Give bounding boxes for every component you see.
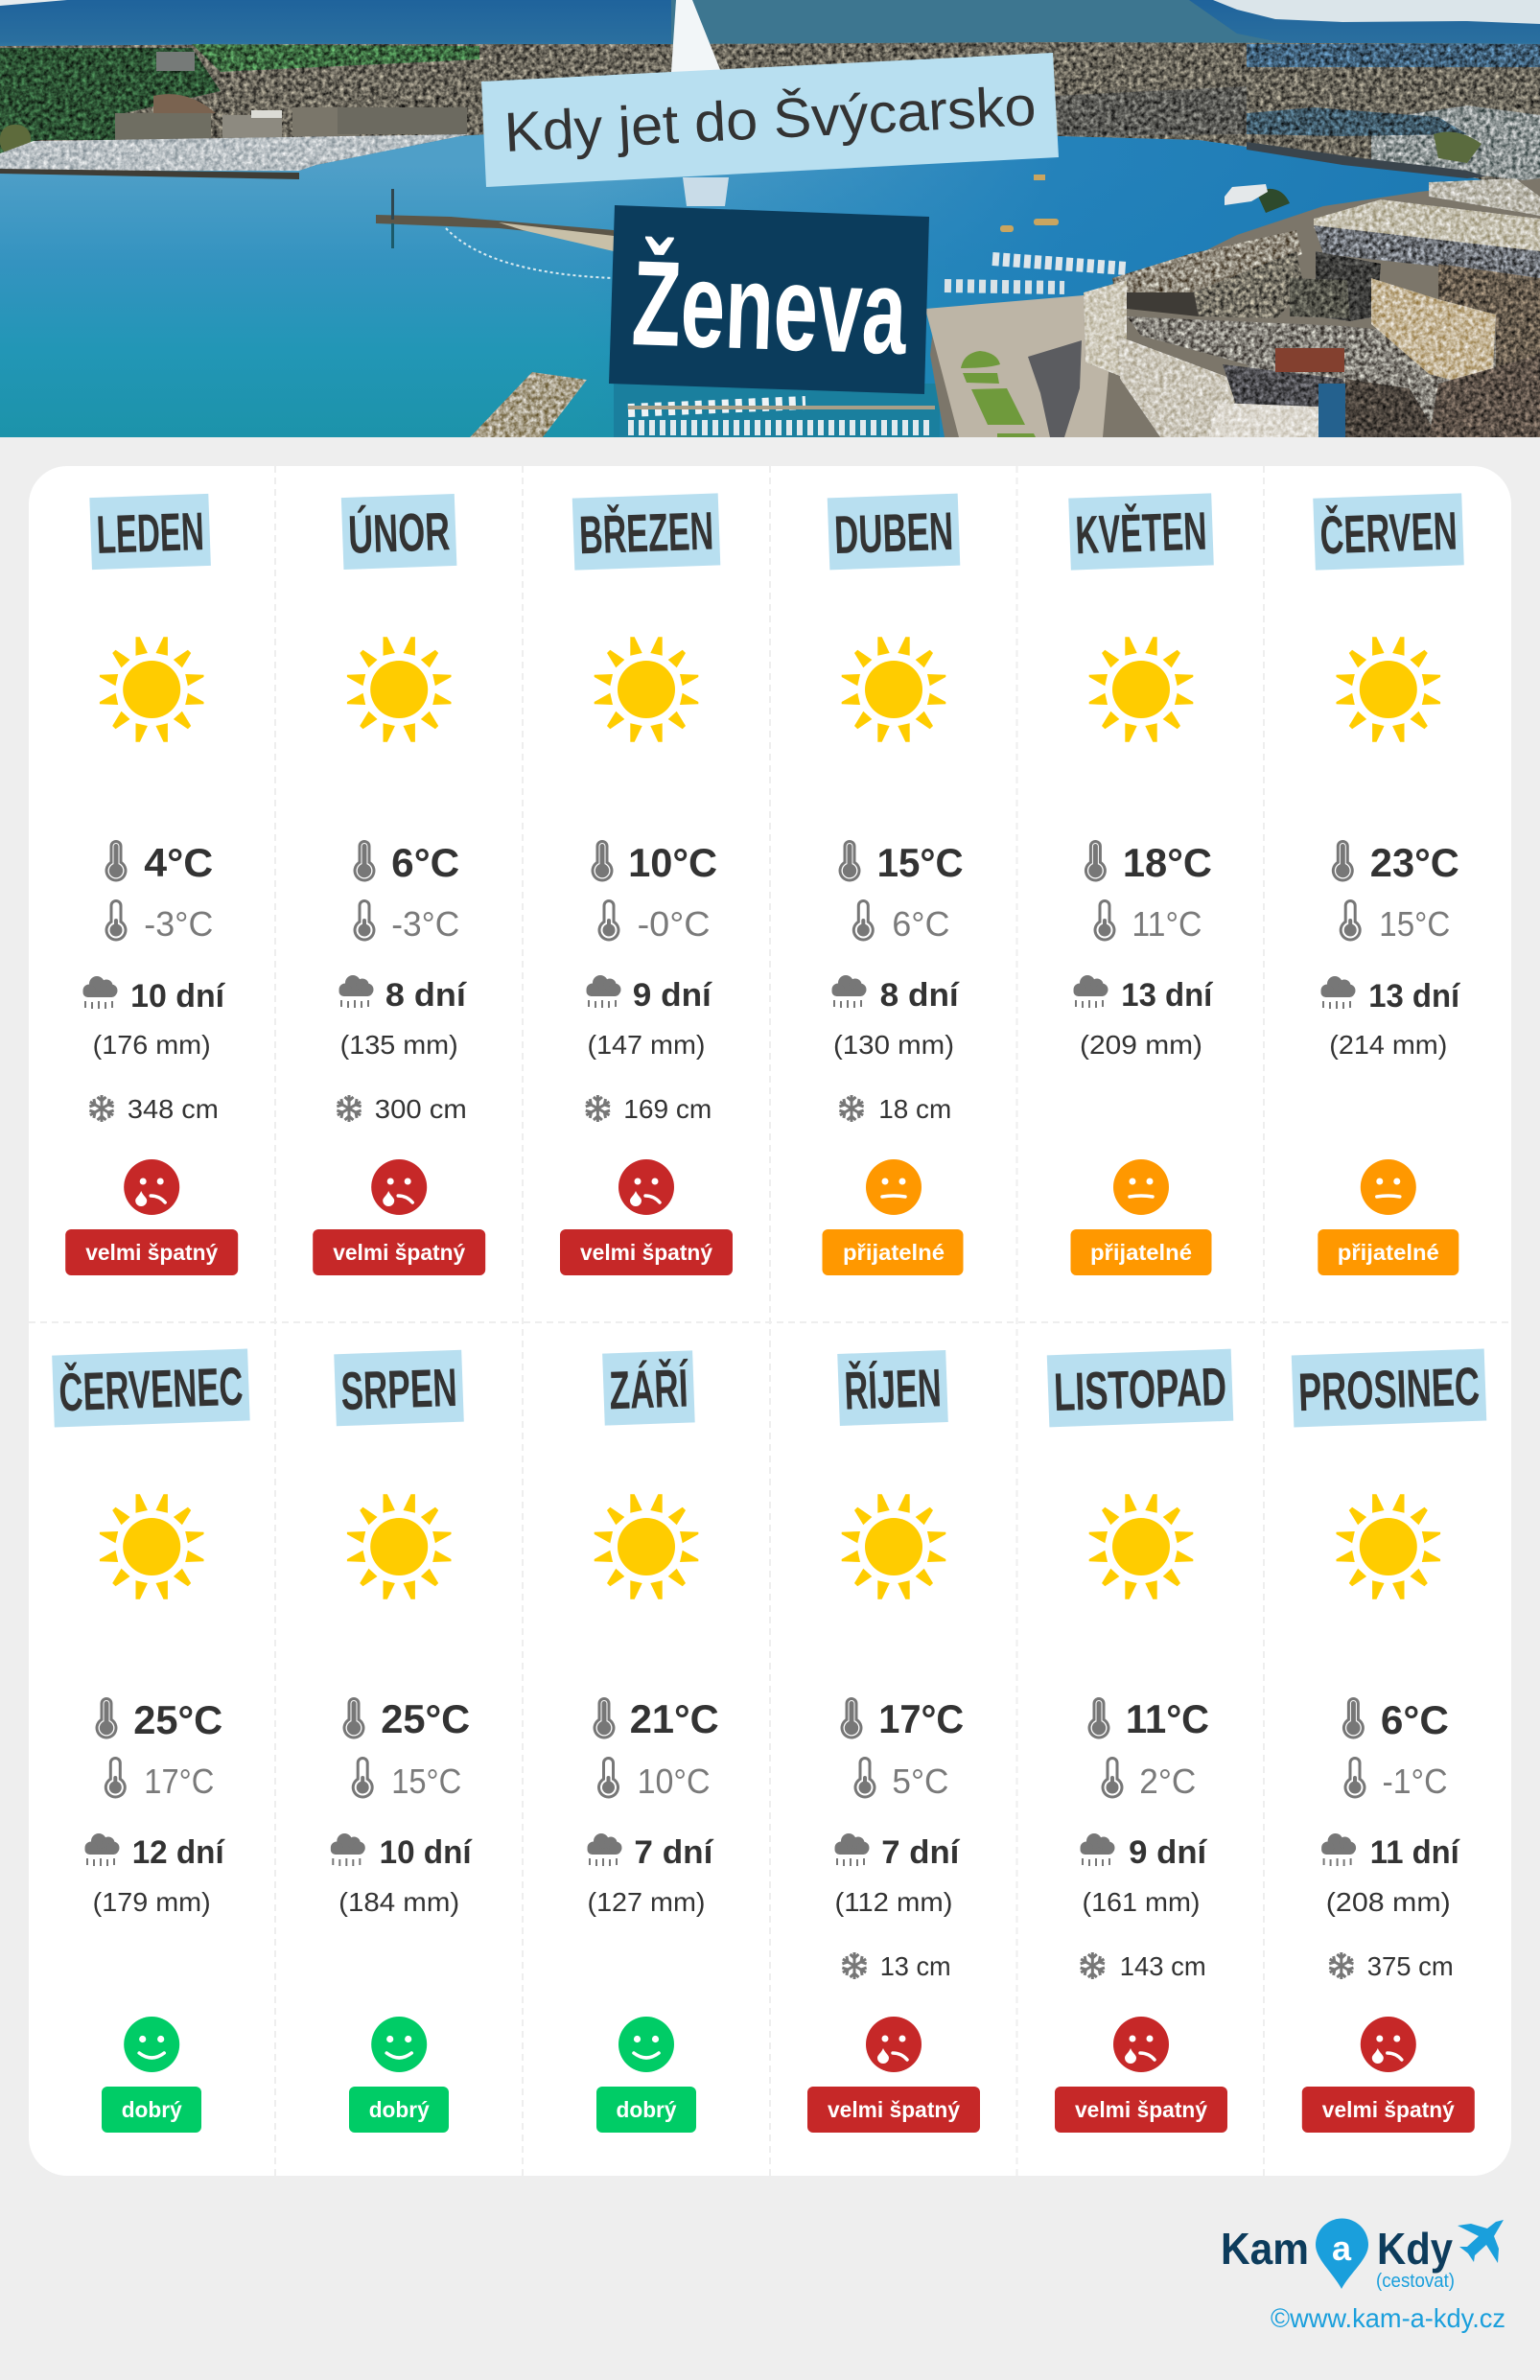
icon: thermometer high <box>105 840 127 882</box>
icon: sun <box>1089 637 1193 742</box>
icon: rain cloud <box>834 1833 869 1866</box>
icon: thermometer high <box>1085 840 1107 882</box>
icon: thermometer high <box>593 1697 616 1739</box>
icon: sun <box>842 637 945 742</box>
icon: rain cloud <box>1321 976 1356 1009</box>
high temperature: 4°C <box>144 840 213 885</box>
icon: thermometer high <box>591 840 614 882</box>
rating badge: dobrý <box>369 2097 430 2122</box>
title banner: Ženeva <box>609 205 929 394</box>
heading: ŘÍJEN: ŘÍJEN <box>843 1357 943 1421</box>
precipitation: (127 mm) <box>587 1887 706 1917</box>
logo: Kam a Kdy (cestovat): Kam <box>1221 2224 1309 2274</box>
icon: neutral face <box>1113 1159 1169 1215</box>
icon: sad face <box>866 2017 922 2072</box>
snowfall: 348 cm <box>128 1094 219 1124</box>
logo: Kam a Kdy (cestovat): (cestovat) <box>1376 2271 1455 2292</box>
panel: ZÁŘÍ <box>587 1350 719 2133</box>
rating badge <box>102 2087 201 2133</box>
rating badge: dobrý <box>616 2097 677 2122</box>
low temperature: -1°C <box>1383 1762 1448 1801</box>
icon: thermometer high <box>838 840 861 882</box>
low temperature: 15°C <box>391 1762 461 1801</box>
icon: thermometer low <box>1093 899 1116 942</box>
icon: thermometer low <box>352 1757 374 1799</box>
heading: ŘÍJEN <box>837 1350 948 1426</box>
icon: neutral face <box>866 1159 922 1215</box>
heading: PROSINEC <box>1292 1349 1486 1427</box>
high temperature: 11°C <box>1126 1696 1209 1741</box>
rainy days: 9 dní <box>633 977 712 1014</box>
low temperature: 5°C <box>892 1762 948 1801</box>
low temperature: -3°C <box>144 904 213 944</box>
icon: sun <box>347 1494 451 1599</box>
rating badge <box>560 1229 733 1275</box>
rainy days: 8 dní <box>880 977 960 1014</box>
snowfall: 375 cm <box>1367 1951 1454 1981</box>
icon: thermometer high <box>1332 840 1354 882</box>
snowfall: 300 cm <box>375 1094 467 1124</box>
icon: rain cloud <box>832 975 867 1008</box>
icon: rain cloud <box>1074 975 1108 1008</box>
precipitation: (184 mm) <box>338 1887 459 1917</box>
icon: thermometer low <box>105 1757 127 1799</box>
logo: Kam a Kdy (cestovat) <box>1221 2219 1504 2292</box>
rating badge: přijatelné <box>843 1240 945 1265</box>
rating badge: velmi špatný <box>580 1240 712 1265</box>
rating badge: velmi špatný <box>85 1240 218 1265</box>
panel: ÚNOR <box>313 494 485 1275</box>
snowfall: 18 cm <box>878 1094 951 1124</box>
rainy days: 7 dní <box>881 1834 961 1871</box>
rainy days: 8 dní <box>385 977 468 1014</box>
rainy days: 9 dní <box>1129 1834 1208 1871</box>
rainy days: 10 dní <box>130 978 226 1015</box>
icon: snowflake <box>336 1095 362 1122</box>
icon: sun <box>100 637 203 742</box>
precipitation: (135 mm) <box>340 1030 458 1060</box>
high temperature: 6°C <box>391 840 459 885</box>
rating badge <box>1055 2087 1227 2133</box>
icon: thermometer low <box>852 899 875 942</box>
icon: sad face <box>371 1159 427 1215</box>
icon: rain cloud <box>587 975 621 1008</box>
icon: snowflake <box>88 1095 115 1122</box>
panel: ČERVENEC <box>52 1348 250 2133</box>
icon: sun <box>1089 1494 1193 1599</box>
rainy days: 10 dní <box>380 1834 473 1871</box>
title banner: Ženeva: Ženeva <box>630 235 909 380</box>
high temperature: 18°C <box>1123 840 1212 885</box>
heading: DUBEN <box>828 494 960 570</box>
high temperature: 10°C <box>628 840 717 885</box>
heading: ÚNOR <box>341 494 456 570</box>
panel: SRPEN <box>331 1350 473 2133</box>
icon: sun <box>1337 1494 1440 1599</box>
icon: sad face <box>124 1159 179 1215</box>
rating badge: velmi špatný <box>333 1240 465 1265</box>
icon: happy face <box>371 2017 427 2072</box>
icon: snowflake <box>584 1095 612 1122</box>
heading: ČERVENEC: ČERVENEC <box>58 1356 244 1422</box>
heading: LEDEN: LEDEN <box>96 501 205 565</box>
icon: thermometer high <box>343 1697 364 1739</box>
precipitation: (179 mm) <box>93 1887 211 1917</box>
heading: ZÁŘÍ <box>602 1350 695 1426</box>
panel: monthly weather calendar <box>29 466 1511 2176</box>
precipitation: (214 mm) <box>1329 1030 1447 1060</box>
panel: LEDEN <box>65 494 238 1275</box>
icon: sad face <box>618 1159 674 1215</box>
high temperature: 6°C <box>1381 1697 1449 1742</box>
high temperature: 17°C <box>878 1696 964 1741</box>
rating badge <box>349 2087 449 2133</box>
icon: snowflake <box>1079 1952 1107 1979</box>
rainy days: 11 dní <box>1370 1834 1460 1871</box>
low temperature: 15°C <box>1379 904 1450 944</box>
rating badge <box>1302 2087 1475 2133</box>
icon: rain cloud <box>339 975 374 1008</box>
icon: sad face <box>1361 2017 1416 2072</box>
panel: ČERVEN <box>1313 493 1464 1275</box>
snowfall: 13 cm <box>880 1951 951 1981</box>
low temperature: -0°C <box>638 904 711 944</box>
rating badge <box>596 2087 696 2133</box>
panel: KVĚTEN <box>1068 493 1214 1275</box>
rating badge <box>1070 1229 1212 1275</box>
heading: LISTOPAD <box>1047 1349 1233 1427</box>
icon: rain cloud <box>84 1833 119 1866</box>
icon: thermometer low <box>597 1757 619 1799</box>
rating badge: dobrý <box>122 2097 182 2122</box>
icon: sun <box>595 637 698 742</box>
title banner: Kdy jet do Švýcarsko <box>481 53 1059 187</box>
low temperature: 2°C <box>1139 1762 1196 1801</box>
icon: sun <box>842 1494 945 1599</box>
rating badge <box>807 2087 980 2133</box>
precipitation: (161 mm) <box>1082 1887 1201 1917</box>
rating badge <box>313 1229 485 1275</box>
icon: rain cloud <box>1321 1833 1356 1866</box>
heading: KVĚTEN <box>1068 493 1214 571</box>
icon: rain cloud <box>82 976 117 1009</box>
rating badge: přijatelné <box>1338 1240 1439 1265</box>
icon: sun <box>1337 637 1440 742</box>
icon: thermometer low <box>1101 1757 1124 1799</box>
low temperature: 10°C <box>638 1762 711 1801</box>
header photo: Geneva lake aerial view <box>0 0 1540 437</box>
panel: PROSINEC <box>1292 1349 1486 2133</box>
icon: thermometer low <box>105 899 127 942</box>
rating badge: přijatelné <box>1090 1240 1192 1265</box>
rating badge <box>65 1229 238 1275</box>
icon: thermometer low <box>1344 1757 1365 1799</box>
icon: rain cloud <box>587 1833 621 1866</box>
heading: ČERVEN: ČERVEN <box>1318 501 1458 565</box>
low temperature: -3°C <box>391 904 459 944</box>
rainy days: 12 dní <box>132 1834 225 1871</box>
icon: sun <box>595 1494 698 1599</box>
rating badge: velmi špatný <box>1322 2097 1455 2122</box>
precipitation: (176 mm) <box>93 1030 211 1060</box>
icon: thermometer high <box>96 1697 117 1739</box>
icon: thermometer high <box>353 840 376 882</box>
icon: happy face <box>618 2017 674 2072</box>
website link: ©www.kam-a-kdy.cz <box>1271 2303 1505 2333</box>
rainy days: 13 dní <box>1368 978 1461 1015</box>
heading: KVĚTEN: KVĚTEN <box>1074 501 1208 565</box>
heading: LEDEN <box>89 494 211 570</box>
icon: thermometer low <box>598 899 619 942</box>
icon: happy face <box>124 2017 179 2072</box>
precipitation: (147 mm) <box>587 1030 706 1060</box>
icon: rain cloud <box>1080 1833 1114 1866</box>
icon: snowflake <box>838 1095 865 1122</box>
icon: thermometer high <box>1087 1697 1110 1739</box>
icon: thermometer low <box>353 899 376 942</box>
panel: LISTOPAD <box>1047 1349 1233 2133</box>
low temperature: 17°C <box>144 1762 214 1801</box>
heading: ČERVEN <box>1313 493 1464 571</box>
title banner: Kdy jet do Švýcarsko: Kdy jet do Švýcarsko <box>502 75 1038 164</box>
rating badge: velmi špatný <box>828 2097 960 2122</box>
logo: Kam a Kdy (cestovat): Kdy <box>1377 2224 1453 2274</box>
icon: snowflake <box>841 1952 868 1979</box>
icon: thermometer low <box>853 1757 876 1799</box>
rainy days: 13 dní <box>1121 977 1214 1014</box>
high temperature: 25°C <box>381 1696 470 1741</box>
high temperature: 23°C <box>1370 840 1459 885</box>
icon: sun <box>347 637 451 742</box>
rainy days: 7 dní <box>634 1834 714 1871</box>
heading: ČERVENEC <box>52 1348 250 1428</box>
high temperature: 25°C <box>133 1697 222 1742</box>
icon: rain cloud <box>331 1833 365 1866</box>
snowfall: 143 cm <box>1120 1951 1206 1981</box>
high temperature: 15°C <box>877 840 964 885</box>
high temperature: 21°C <box>630 1696 719 1741</box>
icon: thermometer high <box>840 1697 863 1739</box>
icon: sad face <box>1113 2017 1169 2072</box>
rating badge <box>823 1229 963 1275</box>
heading: ÚNOR: ÚNOR <box>347 501 451 565</box>
low temperature: 6°C <box>892 904 949 944</box>
icon: thermometer high <box>1342 1697 1365 1739</box>
rating badge: velmi špatný <box>1075 2097 1207 2122</box>
heading: BŘEZEN <box>572 493 720 571</box>
heading: SRPEN <box>334 1350 464 1426</box>
icon: neutral face <box>1361 1159 1416 1215</box>
precipitation: (208 mm) <box>1326 1887 1451 1917</box>
heading: SRPEN: SRPEN <box>339 1357 458 1421</box>
heading: DUBEN: DUBEN <box>833 501 954 565</box>
icon: snowflake <box>1327 1952 1355 1979</box>
panel: ŘÍJEN <box>807 1350 980 2133</box>
snowfall: 169 cm <box>623 1094 712 1124</box>
heading: LISTOPAD: LISTOPAD <box>1053 1356 1227 1422</box>
logo: Kam a Kdy (cestovat): a <box>1332 2228 1352 2268</box>
rating badge <box>1318 1229 1458 1275</box>
icon: thermometer low <box>1340 899 1362 942</box>
panel: DUBEN <box>823 494 964 1275</box>
precipitation: (130 mm) <box>833 1030 954 1060</box>
heading: BŘEZEN: BŘEZEN <box>578 501 714 565</box>
heading: ZÁŘÍ: ZÁŘÍ <box>608 1358 689 1420</box>
precipitation: (112 mm) <box>834 1887 953 1917</box>
precipitation: (209 mm) <box>1080 1030 1202 1060</box>
low temperature: 11°C <box>1132 904 1202 944</box>
icon: sun <box>100 1494 203 1599</box>
panel: BŘEZEN <box>560 493 733 1275</box>
